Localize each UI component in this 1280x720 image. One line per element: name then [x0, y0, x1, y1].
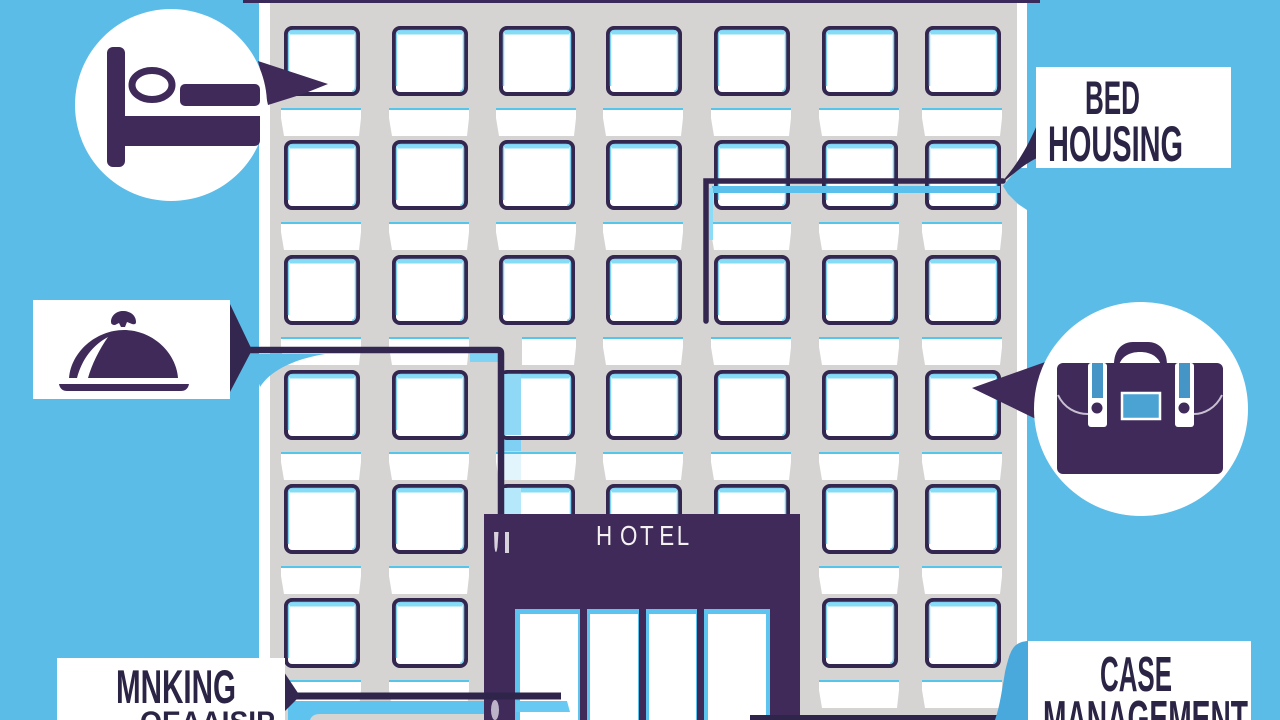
entrance marks — [494, 532, 509, 553]
connector: making — [284, 672, 570, 720]
window sill strips — [281, 108, 1002, 708]
icon: serving cloche — [59, 311, 189, 391]
label text: case: CASE — [1100, 648, 1172, 702]
label text: bed: BED — [1085, 71, 1140, 124]
icon: bed — [107, 47, 260, 167]
blue notch on building edge — [1003, 168, 1037, 210]
arrow: briefcase pointer — [972, 361, 1048, 419]
hotel sign: HOTEL — [596, 521, 689, 552]
panel: bed icon circle — [75, 9, 267, 201]
window grid — [286, 28, 999, 666]
connector: case management — [750, 641, 1028, 720]
connector: meals — [230, 304, 501, 514]
entrance block — [484, 514, 800, 720]
panel: case management label — [750, 641, 1251, 720]
arrow: bed pointer — [258, 61, 328, 105]
panel: briefcase icon circle — [1034, 302, 1248, 516]
panel: making label — [57, 658, 570, 720]
hotel building — [243, 0, 1040, 720]
entrance oval mark — [491, 700, 499, 720]
connector: bed housing — [706, 125, 1037, 321]
panel: meals label — [33, 300, 501, 514]
label text: making: MNKING — [116, 660, 236, 713]
icon: briefcase — [1057, 342, 1223, 474]
entrance doors — [515, 609, 770, 720]
light blue reflection beside entrance — [504, 374, 521, 514]
panel: bed housing label — [706, 67, 1231, 321]
label text: housing: HOUSING — [1048, 116, 1183, 172]
